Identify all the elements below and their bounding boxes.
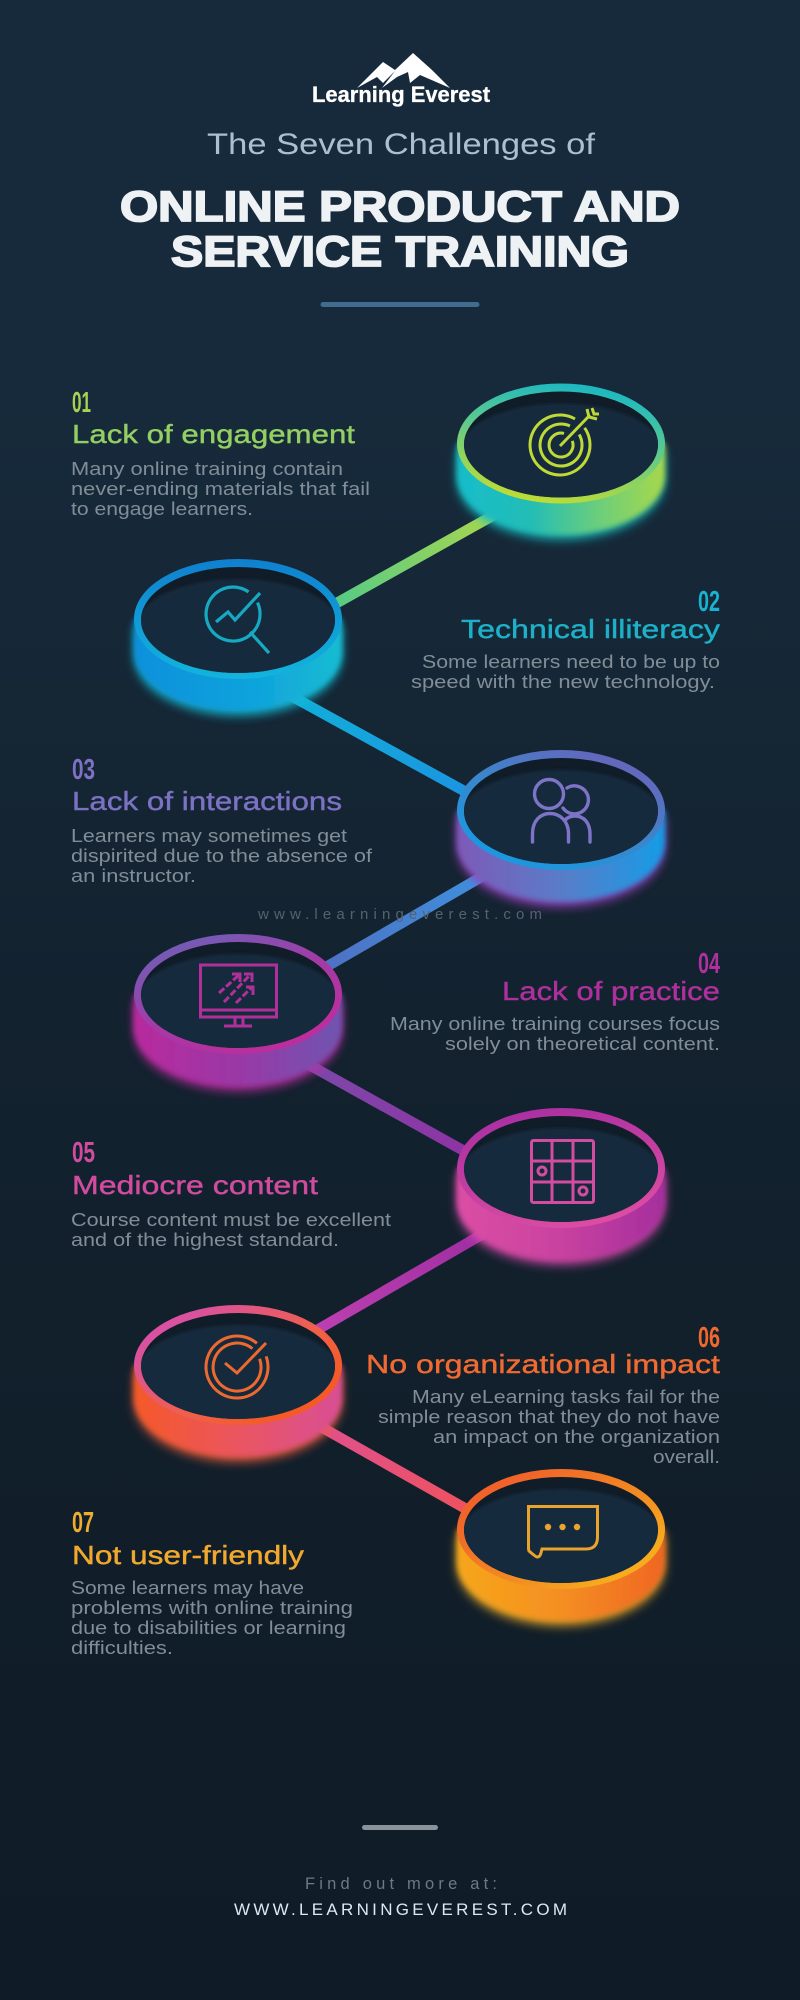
footer call to action: WWW.LEARNINGEVEREST.COM (234, 1900, 567, 1919)
text block 01: Lack of engagement: never-ending materials that fail (71, 478, 370, 499)
subtitle: The Seven Challenges of (207, 128, 596, 161)
text block 06: No organizational impact: Many eLearning tasks fail for the (412, 1386, 720, 1407)
text block 06: No organizational impact (366, 1322, 721, 1467)
text block 01: Lack of engagement: to engage learners. (71, 498, 253, 519)
text block 03: Lack of interactions: Lack of interactions (72, 786, 342, 816)
connector lines (275, 506, 510, 1510)
text block 04: Lack of practice: Lack of practice (502, 976, 720, 1006)
icon: chat bubble (528, 1506, 598, 1557)
text block 04: Lack of practice: Many online training courses focus (390, 1013, 720, 1034)
icon: target with arrow (530, 408, 599, 475)
disc 1 (457, 384, 665, 540)
text block 02: Technical illiteracy: Technical illiteracy (461, 614, 720, 644)
icon: grid with dots (531, 1140, 594, 1202)
footer call to action (234, 1875, 567, 1919)
text block 07: Not user-friendly (71, 1507, 353, 1658)
text block 01: Lack of engagement (71, 387, 370, 519)
disc 7 (457, 1469, 665, 1626)
text block 07: Not user-friendly: due to disabilities or learning (71, 1617, 346, 1638)
text block 02: Technical illiteracy: speed with the new technology. (411, 671, 715, 692)
disc 2 (134, 559, 342, 716)
text block 05: Mediocre content: Course content must be excellent (71, 1209, 391, 1230)
main title: SERVICE TRAINING (171, 228, 629, 276)
text block 05: Mediocre content (71, 1137, 391, 1250)
text block 02: Technical illiteracy: Some learners need to be up to (422, 651, 720, 672)
text block 04: Lack of practice: 04 (698, 948, 720, 980)
footer divider (362, 1825, 438, 1830)
icon: monitor with arrows (200, 965, 276, 1026)
text block 03: Lack of interactions: dispirited due to the absence of (71, 845, 373, 866)
text block 07: Not user-friendly: Some learners may have (71, 1577, 304, 1598)
text block 06: No organizational impact: 06 (698, 1322, 720, 1354)
text block 02: Technical illiteracy (411, 586, 720, 692)
text block 03: Lack of interactions: an instructor. (71, 865, 196, 886)
logo: Learning Everest (312, 53, 491, 107)
logo: Learning Everest: Learning Everest (312, 82, 491, 107)
text block 07: Not user-friendly: Not user-friendly (72, 1540, 304, 1570)
text block 04: Lack of practice: solely on theoretical content. (445, 1033, 720, 1054)
watermark: www.learningeverest.com (257, 906, 542, 923)
text block 06: No organizational impact: simple reason that they do not have (378, 1406, 720, 1427)
text block 03: Lack of interactions (71, 754, 373, 886)
disc 6 (134, 1305, 342, 1462)
disc 3 (457, 750, 665, 907)
main title: ONLINE PRODUCT AND (120, 183, 680, 231)
text block 01: Lack of engagement: Many online training contain (71, 458, 343, 479)
icon: check in circle (206, 1336, 268, 1398)
text block 06: No organizational impact: an impact on the organization (433, 1426, 720, 1447)
text block 07: Not user-friendly: 07 (72, 1507, 94, 1539)
footer call to action: Find out more at: (305, 1875, 497, 1893)
text block 02: Technical illiteracy: 02 (698, 586, 720, 618)
text block 06: No organizational impact: overall. (653, 1446, 720, 1467)
icon: two people (532, 780, 590, 842)
disc 5 (457, 1108, 665, 1265)
text block 01: Lack of engagement: 01 (72, 387, 91, 419)
disc 4 (134, 934, 342, 1091)
text block 03: Lack of interactions: Learners may sometimes get (71, 825, 347, 846)
text block 01: Lack of engagement: Lack of engagement (72, 419, 356, 449)
title divider (320, 302, 480, 307)
text block 05: Mediocre content: and of the highest standard. (71, 1229, 339, 1250)
icon: magnifier with chart (206, 587, 269, 653)
text block 06: No organizational impact: No organizational impact (366, 1349, 721, 1379)
text block 03: Lack of interactions: 03 (72, 754, 95, 786)
text block 05: Mediocre content: Mediocre content (72, 1170, 319, 1200)
text block 04: Lack of practice (390, 948, 720, 1054)
text block 07: Not user-friendly: problems with online training (71, 1597, 353, 1618)
text block 05: Mediocre content: 05 (72, 1137, 95, 1169)
text block 07: Not user-friendly: difficulties. (71, 1637, 173, 1658)
main title (120, 183, 680, 276)
